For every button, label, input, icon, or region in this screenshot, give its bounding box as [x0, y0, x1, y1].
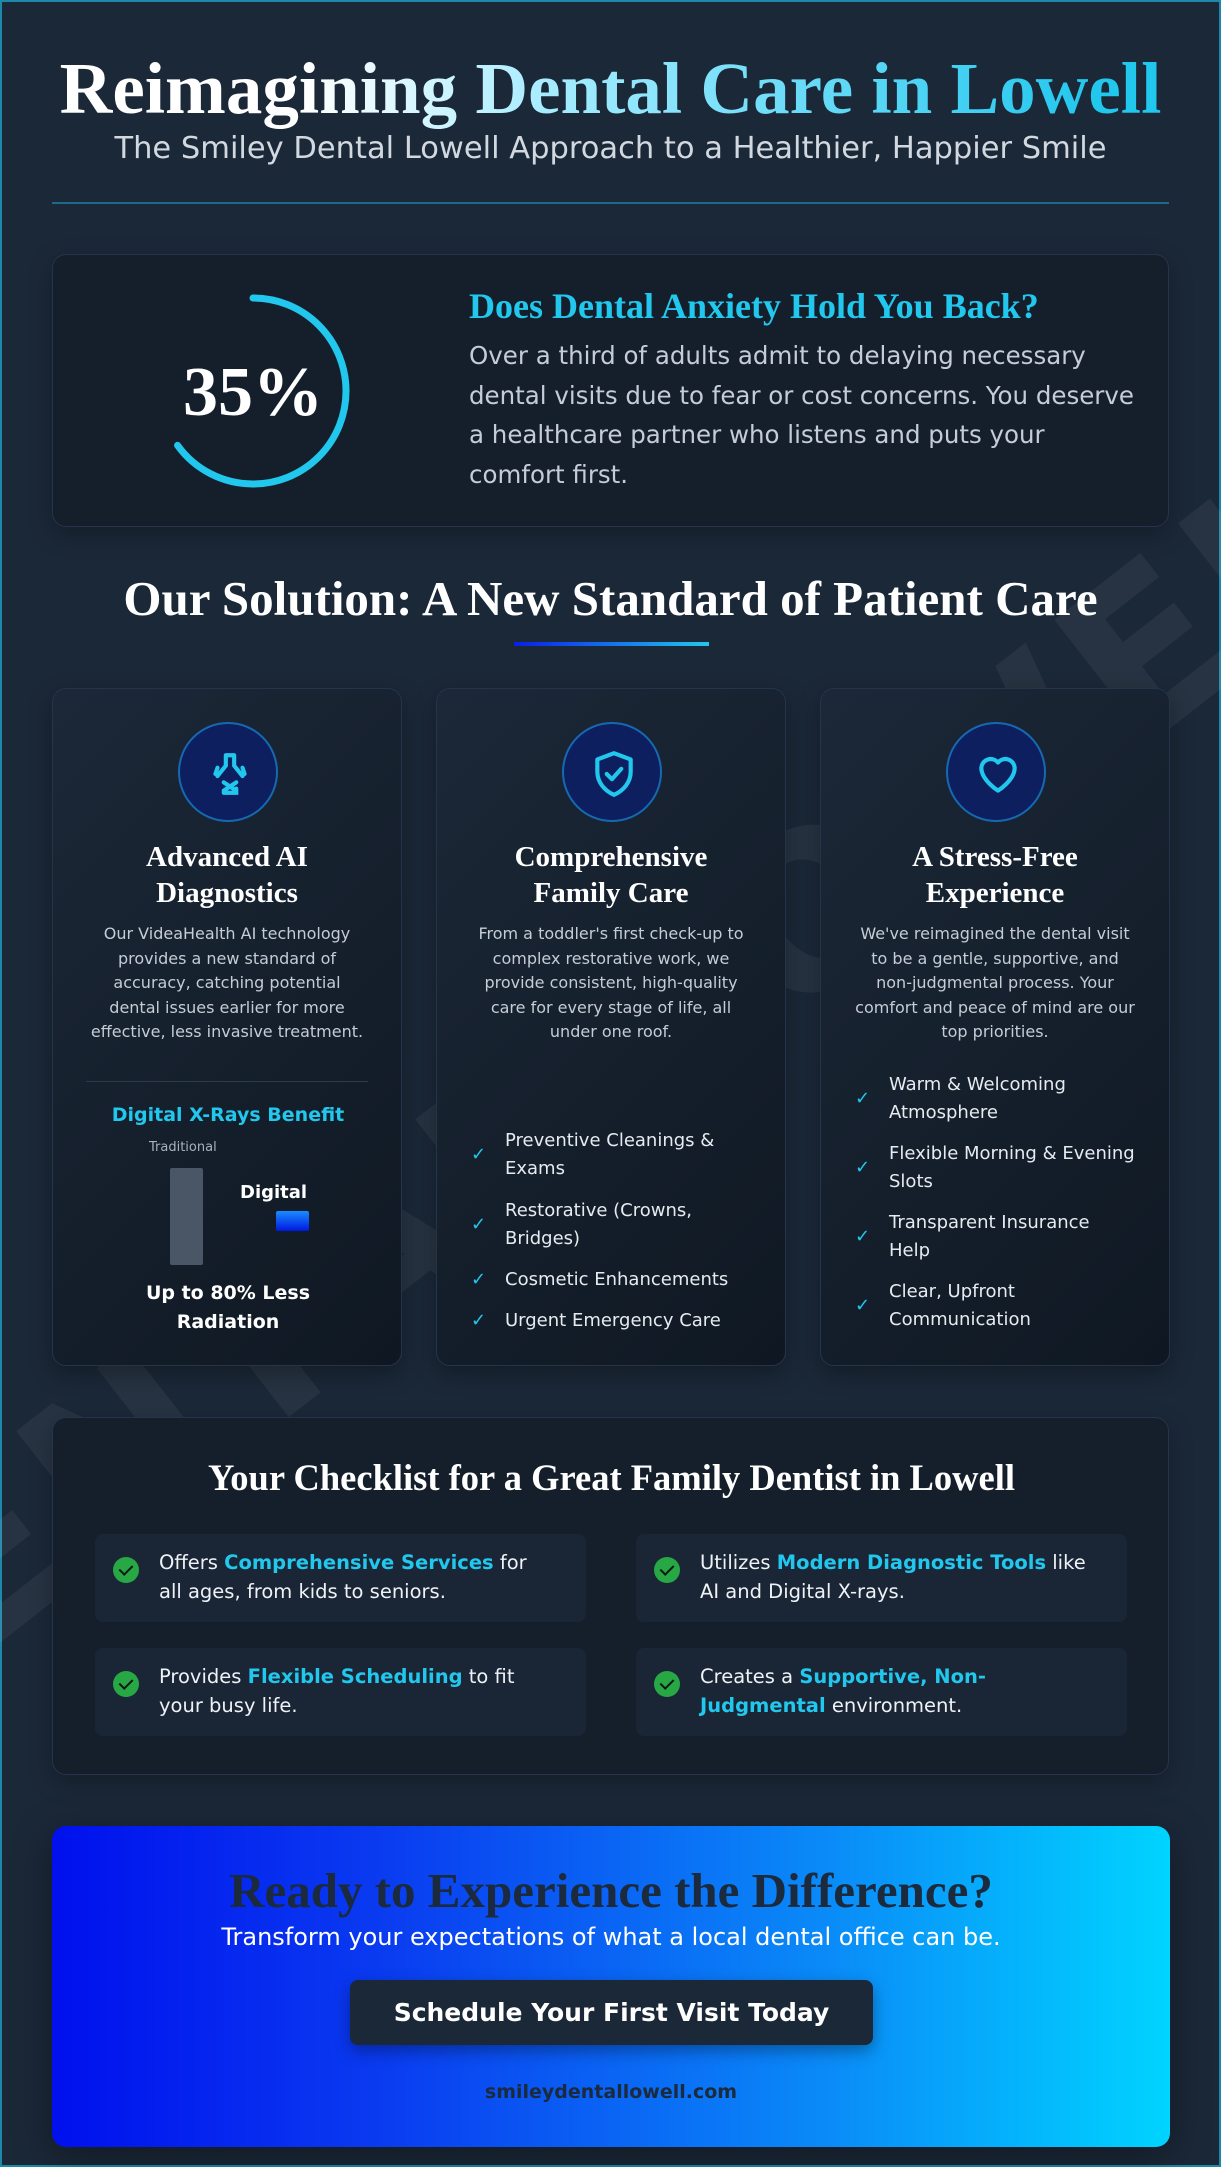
benefit list: Help: [889, 1240, 930, 1261]
panel: dental anxiety stat: [52, 254, 1169, 527]
paragraph: Over a third of adults admit to delaying necessary dental visits due to fear or cost concerns. You deserve a healthcare partner who listens and puts your comfort first.: [469, 341, 1134, 488]
card title: Family Care: [534, 877, 688, 909]
chart: digital x-rays: Traditional: [149, 1140, 217, 1155]
benefit list: Communication: [889, 1309, 1031, 1330]
item 2: Utilizes Modern Diagnostic Tools like AI and Digital X-rays.: [700, 1551, 1086, 1603]
item 1: Offers Comprehensive Services for all ages, from kids to seniors.: [159, 1551, 527, 1603]
benefit list: Warm & Welcoming: [889, 1074, 1066, 1095]
icon: shield: [562, 722, 662, 822]
title: Reimagining Dental Care in Lowell: [60, 48, 1161, 129]
card description: Our VideaHealth AI technology provides a new standard of accuracy, catching potential dental issues earlier for more effective, less invasive treatment.: [91, 924, 363, 1041]
card description: From a toddler's first check-up to complex restorative work, we provide consistent, high-quality care for every stage of life, all under one roof.: [478, 924, 744, 1041]
benefit list: Atmosphere: [889, 1102, 998, 1123]
card title: [515, 841, 707, 909]
item 3: Provides Flexible Scheduling to fit your busy life.: [159, 1665, 514, 1717]
item 4: [636, 1648, 1127, 1736]
CTA heading: Ready to Experience the Difference?: [229, 1863, 993, 1918]
service list: Urgent Emergency Care: [505, 1310, 721, 1331]
card title: Advanced AI: [146, 841, 308, 873]
heading: Does Dental Anxiety Hold You Back?: [469, 286, 1039, 326]
button: [350, 1980, 873, 2045]
icon: AI: [178, 722, 278, 822]
item 2: [636, 1534, 1127, 1622]
CTA subtext: Transform your expectations of what a local dental office can be.: [221, 1923, 1001, 1951]
card: AI diagnostics: [52, 688, 402, 1366]
card title: [146, 841, 308, 909]
website url: smileydentallowell.com: [485, 2081, 737, 2103]
benefit list: Flexible Morning & Evening: [889, 1143, 1135, 1164]
card title: A Stress-Free: [912, 841, 1078, 873]
card: family care: [436, 688, 786, 1366]
card title: Comprehensive: [515, 841, 707, 873]
service list: Cosmetic Enhancements: [505, 1269, 728, 1290]
section heading: Our Solution: A New Standard of Patient Care: [123, 571, 1098, 626]
benefit list: Clear, Upfront: [889, 1281, 1015, 1302]
item 4: Creates a Supportive, Non-Judgmental environment.: [700, 1665, 986, 1717]
chart: digital x-rays: Radiation: [177, 1311, 279, 1333]
card description: We've reimagined the dental visit to be a gentle, supportive, and non-judgmental process. Your comfort and peace of mind are our top priorities.: [855, 924, 1135, 1041]
benefit list: Transparent Insurance: [889, 1212, 1090, 1233]
checklist heading: Your Checklist for a Great Family Dentist in Lowell: [208, 1457, 1015, 1498]
card title: Experience: [926, 877, 1064, 909]
service list: [474, 1130, 728, 1331]
card title: Diagnostics: [156, 877, 298, 909]
benefit list: Slots: [889, 1171, 933, 1192]
benefit list: [858, 1074, 1135, 1330]
stat ring 35%: [174, 294, 350, 488]
chart: digital x-rays: Digital X-Rays Benefit: [112, 1104, 344, 1126]
stat ring 35%: 35%: [183, 354, 323, 431]
card: stress-free: [820, 688, 1170, 1366]
button: Schedule Your First Visit Today: [394, 1998, 829, 2027]
item 1: [95, 1534, 586, 1622]
icon: heart: [946, 722, 1046, 822]
service list: Exams: [505, 1158, 565, 1179]
card title: [912, 841, 1078, 909]
panel: call to action: [52, 1826, 1170, 2147]
subtitle: The Smiley Dental Lowell Approach to a Healthier, Happier Smile: [114, 131, 1107, 166]
service list: Bridges): [505, 1228, 580, 1249]
service list: Restorative (Crowns,: [505, 1200, 692, 1221]
item 3: [95, 1648, 586, 1736]
chart: digital x-rays: Up to 80% Less: [146, 1282, 310, 1304]
panel: checklist: [52, 1417, 1169, 1775]
chart: digital x-rays: Digital: [240, 1182, 307, 1203]
service list: Preventive Cleanings &: [505, 1130, 714, 1151]
chart: digital x-rays: [112, 1104, 344, 1333]
